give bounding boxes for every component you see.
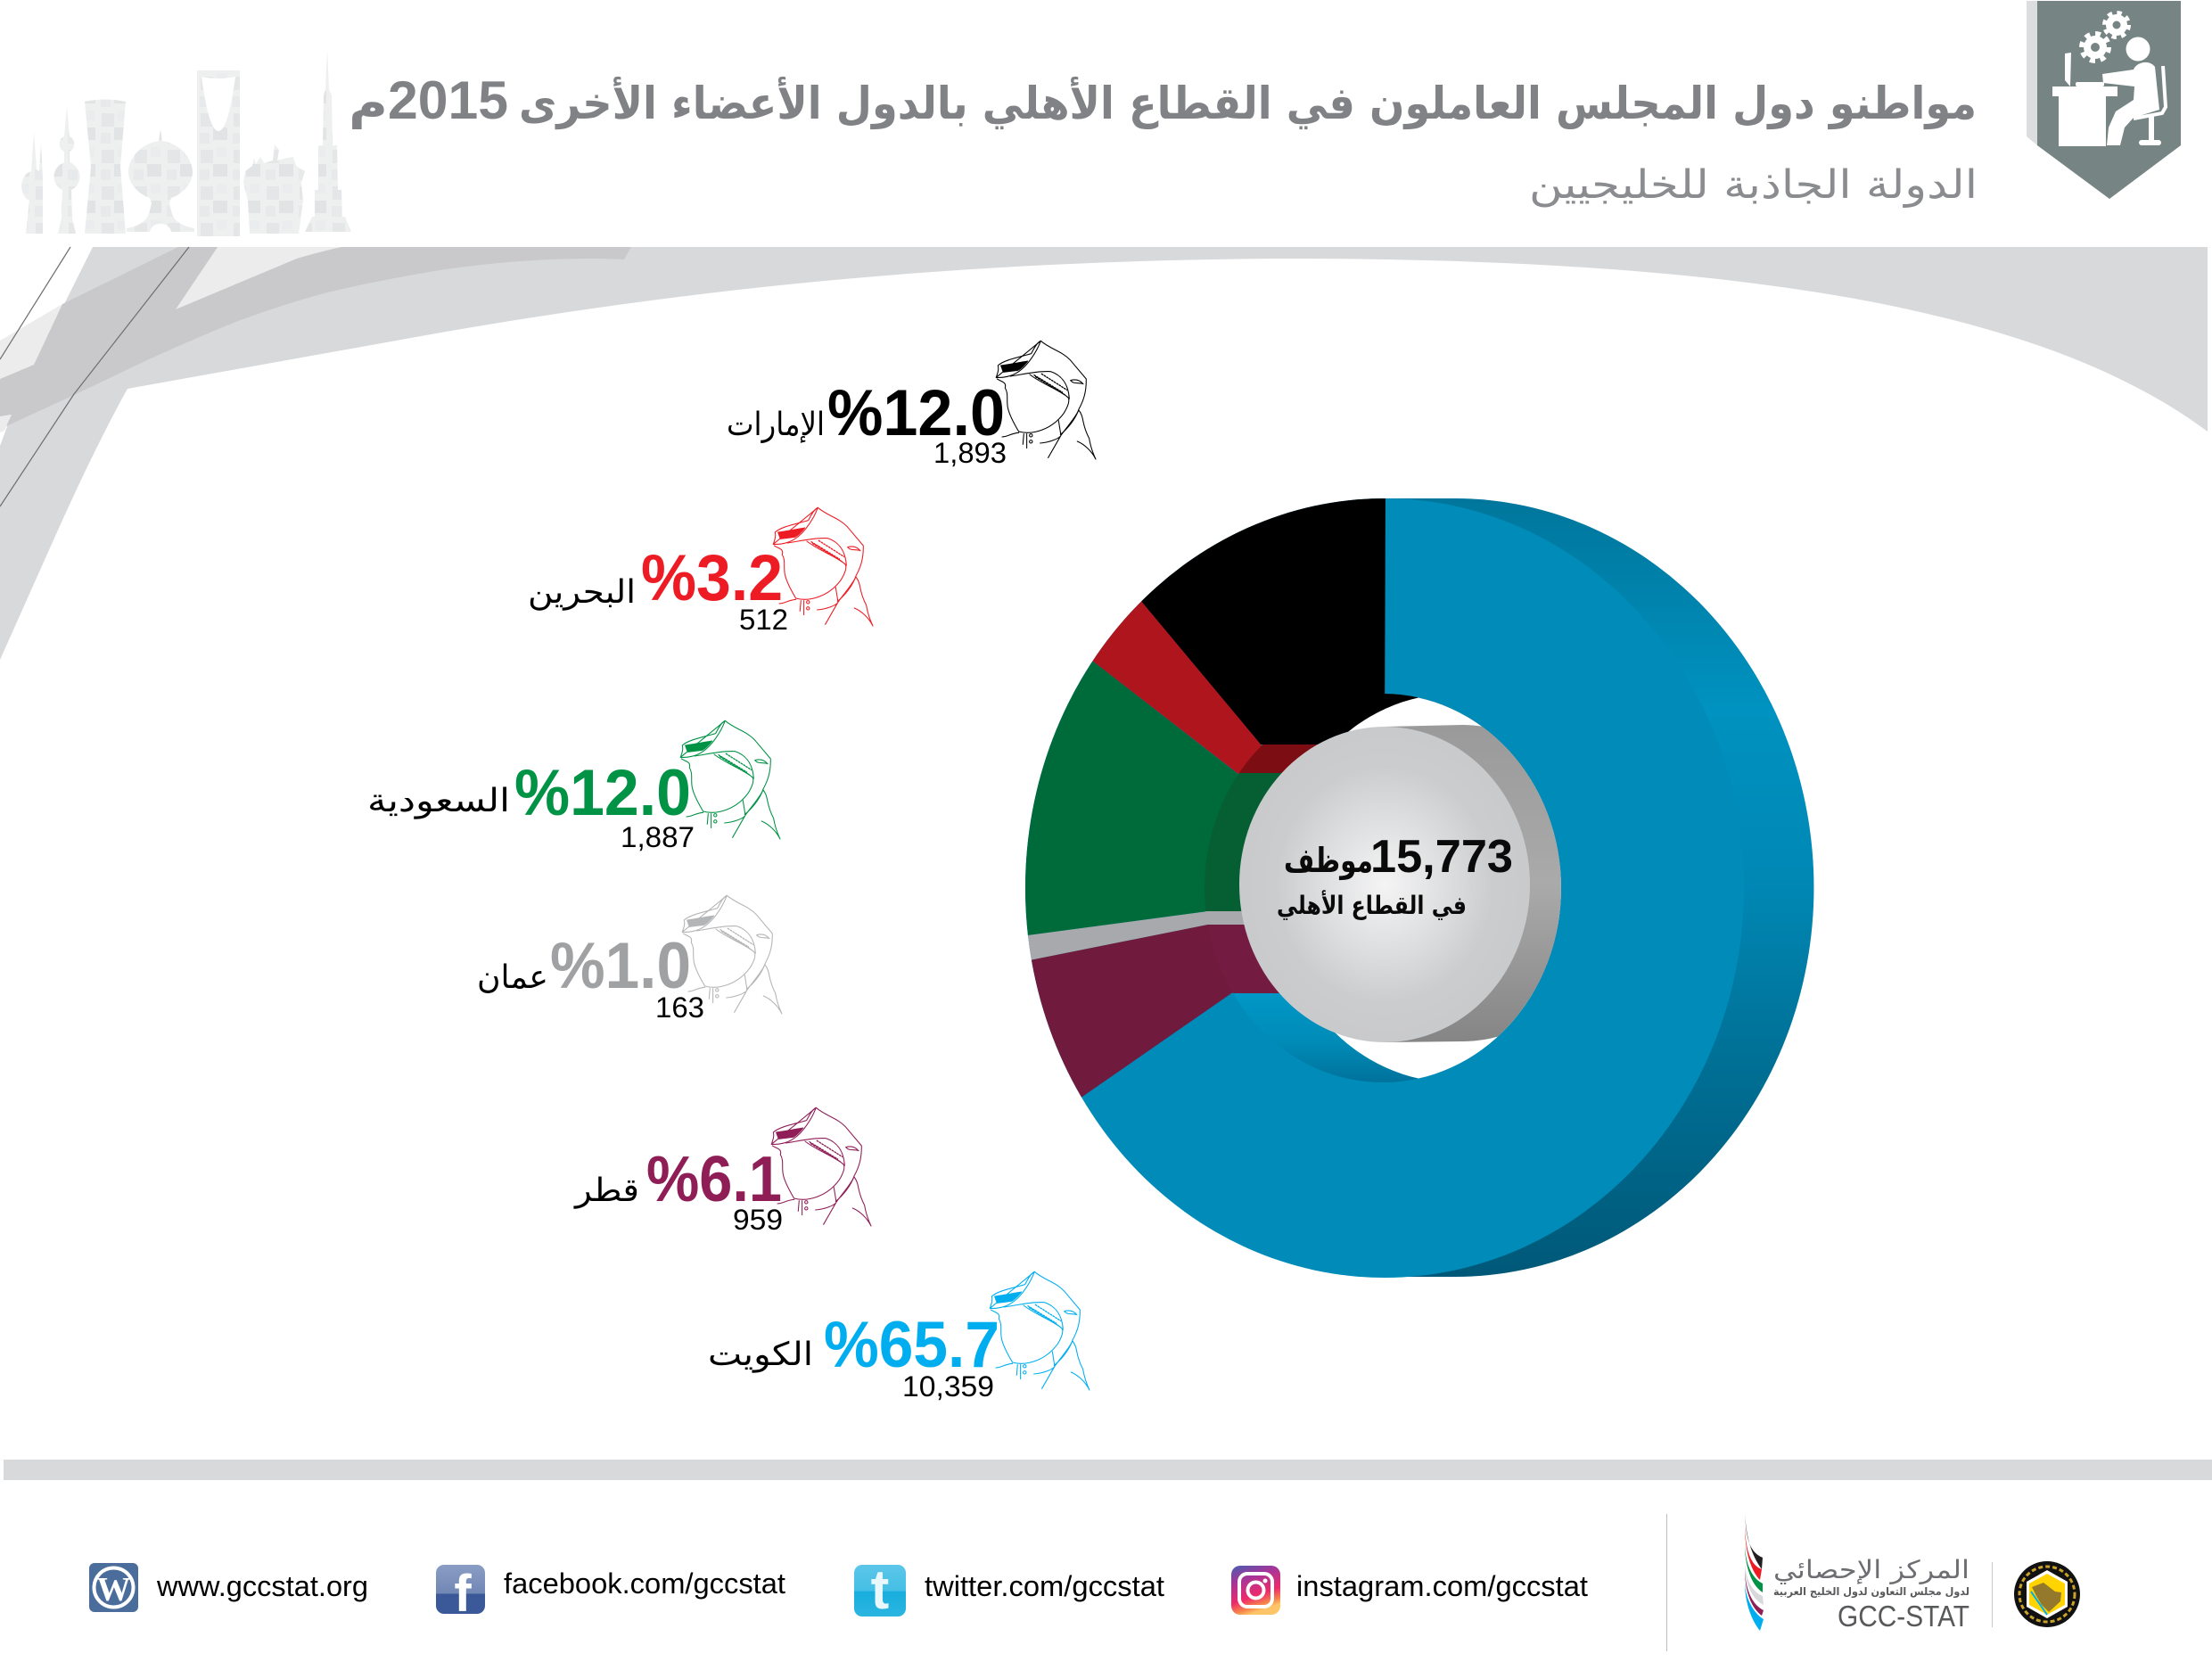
label: السعودية (367, 783, 510, 819)
chart: 3D donut (1025, 498, 1813, 1278)
value: %1.0 (550, 930, 691, 1002)
value: %12.0 (827, 377, 1005, 449)
label: الإمارات (727, 407, 825, 443)
icon: person red (773, 507, 873, 626)
subtitle: الدولة الجاذبة للخليجيين (1529, 162, 1978, 208)
divider (1666, 1514, 1667, 1651)
row: Oman (477, 895, 782, 1024)
icon: facebook (436, 1565, 485, 1623)
title: 2015 (388, 70, 508, 130)
footer bar (4, 1460, 2212, 1480)
donut side wall (1385, 498, 1813, 1277)
donut front face segments (1025, 498, 1743, 1278)
panel: header gradient band (343, 205, 1591, 273)
label: عمان (477, 959, 548, 996)
label: البحرين (528, 574, 636, 611)
title: م (349, 78, 388, 129)
icon: worker badge (2027, 1, 2181, 199)
icon: gulf skyline (21, 49, 351, 236)
logo: GCC-STAT: لدول مجلس التعاون لدول الخليج العربية (1773, 1585, 1969, 1599)
donut hole and inner wall (1205, 694, 1561, 1082)
centre total label: موظف (1284, 841, 1373, 880)
icon: person grey (682, 895, 782, 1014)
row: Qatar (573, 1107, 871, 1236)
label: قطر (573, 1172, 639, 1209)
panel: background swoosh (0, 247, 2208, 660)
footer: twitter (854, 1559, 1164, 1621)
icon: wordpress: W (96, 1571, 130, 1608)
row: Bahrain (528, 507, 873, 636)
icon: GCC seal (2014, 1561, 2080, 1627)
count: 512 (739, 604, 788, 636)
value: %3.2 (641, 542, 783, 614)
icon: logo feather (1745, 1510, 1764, 1631)
icon: person maroon (771, 1107, 871, 1226)
count: 163 (655, 991, 704, 1024)
logo: GCC-STAT (1745, 1510, 2080, 1633)
logo: GCC-STAT: GCC-STAT (1838, 1600, 1969, 1633)
icon: wordpress (89, 1563, 138, 1612)
title: مواطنو دول المجلس العاملون في القطاع الأهلي بالدول الأعضاء الأخرى (519, 76, 1977, 130)
footer: facebook: facebook.com/gccstat (504, 1567, 785, 1600)
count: 10,359 (902, 1370, 994, 1403)
icon: instagram (1231, 1566, 1280, 1615)
count: 1,887 (621, 821, 695, 853)
icon: facebook: f (454, 1565, 472, 1623)
logo: GCC-STAT: المركز الإحصائي (1773, 1555, 1969, 1584)
icon: person black (996, 341, 1096, 459)
row: Kuwait (708, 1271, 1090, 1403)
value: %6.1 (646, 1144, 782, 1215)
count: 959 (733, 1204, 783, 1236)
icon: twitter (854, 1559, 906, 1621)
icon: person green (680, 720, 780, 839)
centre disc (1239, 727, 1530, 1042)
footer: instagram (1231, 1566, 1588, 1615)
icon: twitter: t (871, 1559, 889, 1621)
footer: website: www.gccstat.org (156, 1570, 368, 1602)
icon: person cyan (990, 1271, 1090, 1390)
count: 1,893 (933, 437, 1007, 469)
label: الكويت (708, 1337, 813, 1373)
value: %12.0 (514, 757, 691, 829)
row: UAE (727, 341, 1096, 469)
footer: facebook (436, 1565, 785, 1623)
centre total label: 15,773 (1370, 831, 1513, 883)
centre total label: في القطاع الأهلي (1277, 890, 1467, 920)
value: %65.7 (824, 1309, 999, 1381)
footer: instagram: instagram.com/gccstat (1296, 1570, 1588, 1602)
centre total label (1277, 831, 1513, 920)
row: Saudi Arabia (367, 720, 780, 853)
footer: website (89, 1563, 368, 1612)
footer: twitter: twitter.com/gccstat (925, 1570, 1164, 1602)
